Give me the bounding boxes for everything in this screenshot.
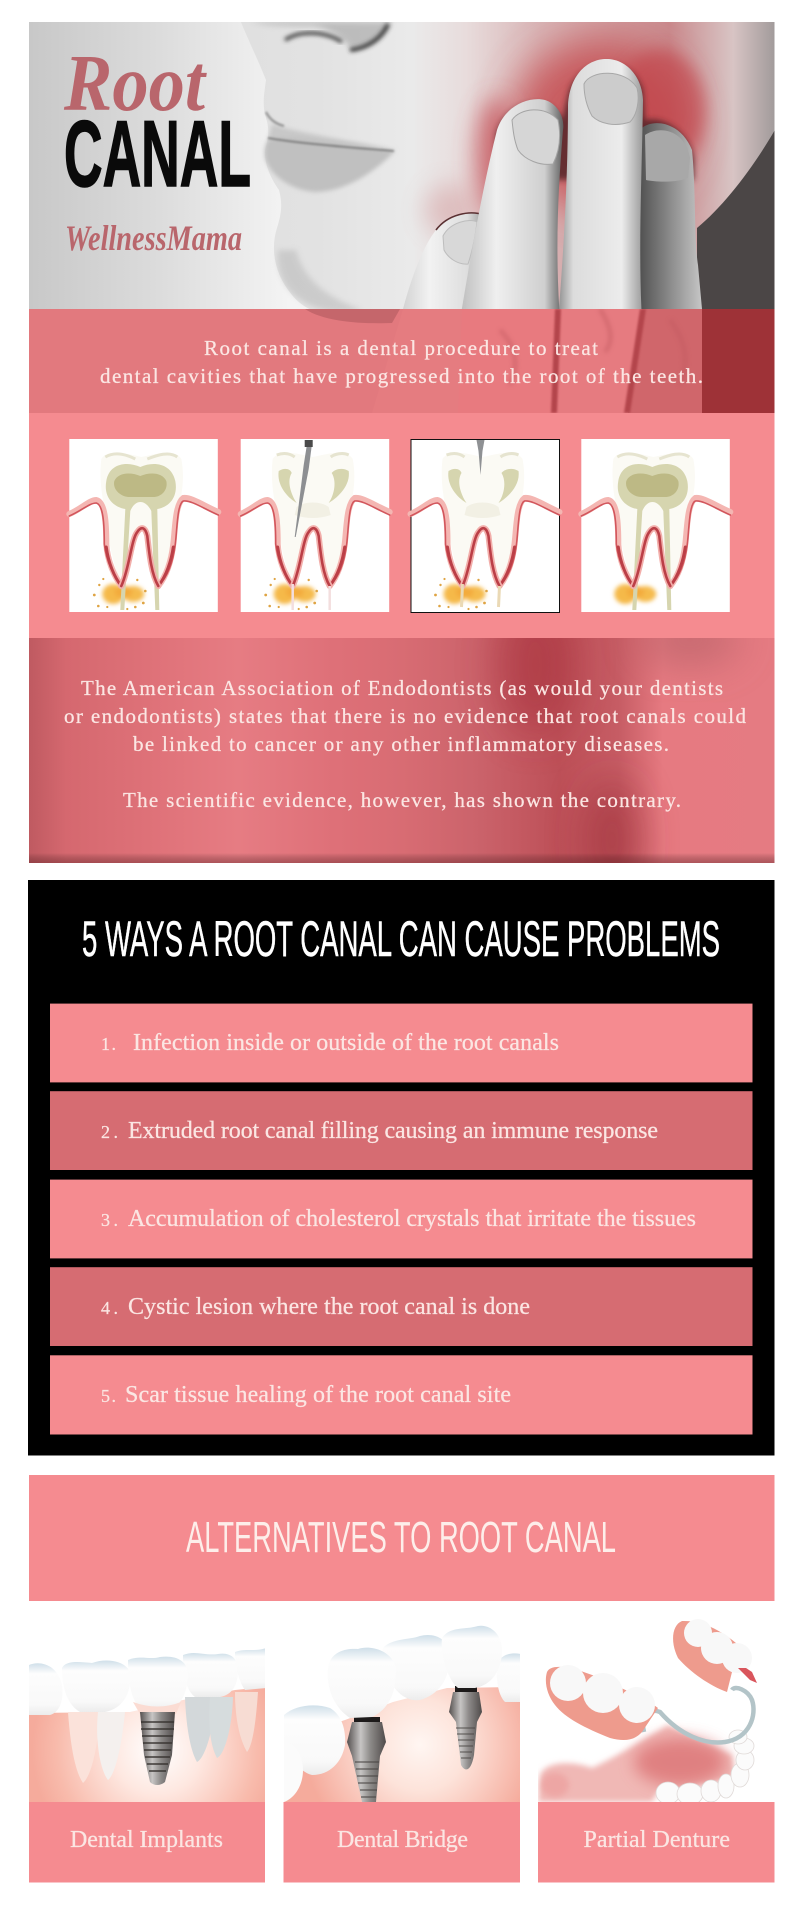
illustration: partial denture (538, 1619, 757, 1805)
band base (29, 309, 403, 413)
middle through band (556, 309, 642, 413)
dark background behind jaw (697, 130, 774, 309)
lower teeth (656, 1730, 754, 1805)
logo: Wellness Mama: WellnessMama (65, 218, 242, 258)
tooth step 3: file at top (410, 440, 560, 612)
panel: evidence text (29, 638, 774, 863)
intro text: Root canal is a dental procedure to treat (204, 336, 598, 360)
label: Partial Denture: Partial Denture (584, 1827, 730, 1853)
row 1: Infection inside or outside of the root canals (133, 1030, 559, 1056)
ring through band (628, 309, 702, 413)
panel: 5 ways (28, 880, 774, 1456)
illustration: dental bridge (284, 1626, 521, 1802)
evidence text: or endodontists) states that there is no evidence that root canals could (64, 704, 747, 728)
row 2: 2. (101, 1122, 118, 1142)
crown collar (133, 1702, 181, 1714)
black background (28, 880, 774, 1456)
left implant (347, 1717, 386, 1802)
front molar (284, 1742, 303, 1802)
streaked background (29, 638, 775, 863)
evidence text: The scientific evidence, however, has shown the contrary. (123, 788, 681, 812)
nose (250, 22, 392, 50)
intro text: dental cavities that have progressed into the root of the teeth. (100, 364, 703, 388)
row 3: Accumulation of cholesterol crystals that irritate the tissues (128, 1206, 696, 1232)
row 4: Cystic lesion where the root canal is done (128, 1294, 530, 1320)
chin through band (305, 309, 400, 323)
grey backdrop (29, 22, 308, 309)
tooth step 4: filled (581, 439, 730, 612)
right denture (673, 1619, 757, 1692)
dark streak top right (642, 638, 744, 676)
tooth step 2: file in canal (241, 439, 390, 612)
teeth (29, 1648, 266, 1715)
illustration: dental implant (29, 1648, 266, 1802)
left molars (284, 1705, 345, 1775)
row 1: 1. (101, 1034, 116, 1054)
dark background through band (702, 309, 776, 413)
intro text (100, 336, 703, 388)
red pain glow (424, 40, 705, 236)
ring finger (640, 123, 702, 309)
crown right (442, 1626, 502, 1688)
dark streak bottom (586, 780, 638, 900)
row 2 (50, 1091, 752, 1170)
panel: root canal steps (29, 413, 774, 638)
row 3: 3. (101, 1210, 118, 1230)
crown left (328, 1648, 396, 1718)
row 5: 5. (101, 1386, 116, 1406)
row 3 (50, 1180, 752, 1258)
face and cheek (241, 22, 776, 324)
index finger (460, 99, 563, 320)
evidence text: The American Association of Endodontists (as would your dentists (81, 676, 723, 700)
label: Partial Denture (538, 1802, 774, 1882)
row 4: 4. (101, 1298, 118, 1318)
index through band (458, 309, 560, 413)
gum (284, 1687, 521, 1802)
lips (265, 112, 397, 192)
finger gaps (551, 309, 646, 413)
row 5: Scar tissue healing of the root canal site (125, 1382, 511, 1408)
label: Dental Implants: Dental Implants (70, 1827, 223, 1853)
right natural tooth (497, 1653, 521, 1702)
alternatives heading panel (29, 1475, 774, 1601)
title: CANAL: CANAL (64, 101, 251, 206)
bridge mid tooth (383, 1635, 450, 1700)
tooth step 1 (69, 439, 218, 612)
open mouth (538, 1725, 735, 1802)
chin shading (278, 250, 362, 312)
fingers through band (372, 309, 474, 413)
implant screw (140, 1712, 175, 1785)
label: Dental Bridge: Dental Bridge (337, 1827, 468, 1853)
bottom edge (29, 854, 774, 863)
left denture (546, 1665, 658, 1740)
thumb finger (403, 212, 479, 309)
row 2: Extruded root canal filling causing an immune response (128, 1118, 658, 1144)
gum (29, 1687, 266, 1802)
translucent intro band (29, 309, 776, 413)
row 4 (50, 1267, 752, 1346)
natural roots (68, 1692, 258, 1783)
finger shadow halos (496, 64, 694, 180)
middle finger (558, 59, 643, 320)
steps background (29, 413, 774, 638)
evidence text (64, 676, 747, 812)
dark streak top (486, 638, 577, 735)
knuckle marks (500, 310, 612, 384)
metal connector (643, 1688, 754, 1743)
title: Root: Root (63, 40, 208, 128)
row 1 (50, 1004, 752, 1082)
label: Dental Bridge (284, 1802, 520, 1882)
row 5 (50, 1355, 752, 1434)
label: Dental Implants (29, 1802, 265, 1882)
evidence text: be linked to cancer or any other inflammatory diseases. (133, 732, 669, 756)
hero photo panel (29, 22, 776, 324)
right implant (449, 1686, 482, 1769)
